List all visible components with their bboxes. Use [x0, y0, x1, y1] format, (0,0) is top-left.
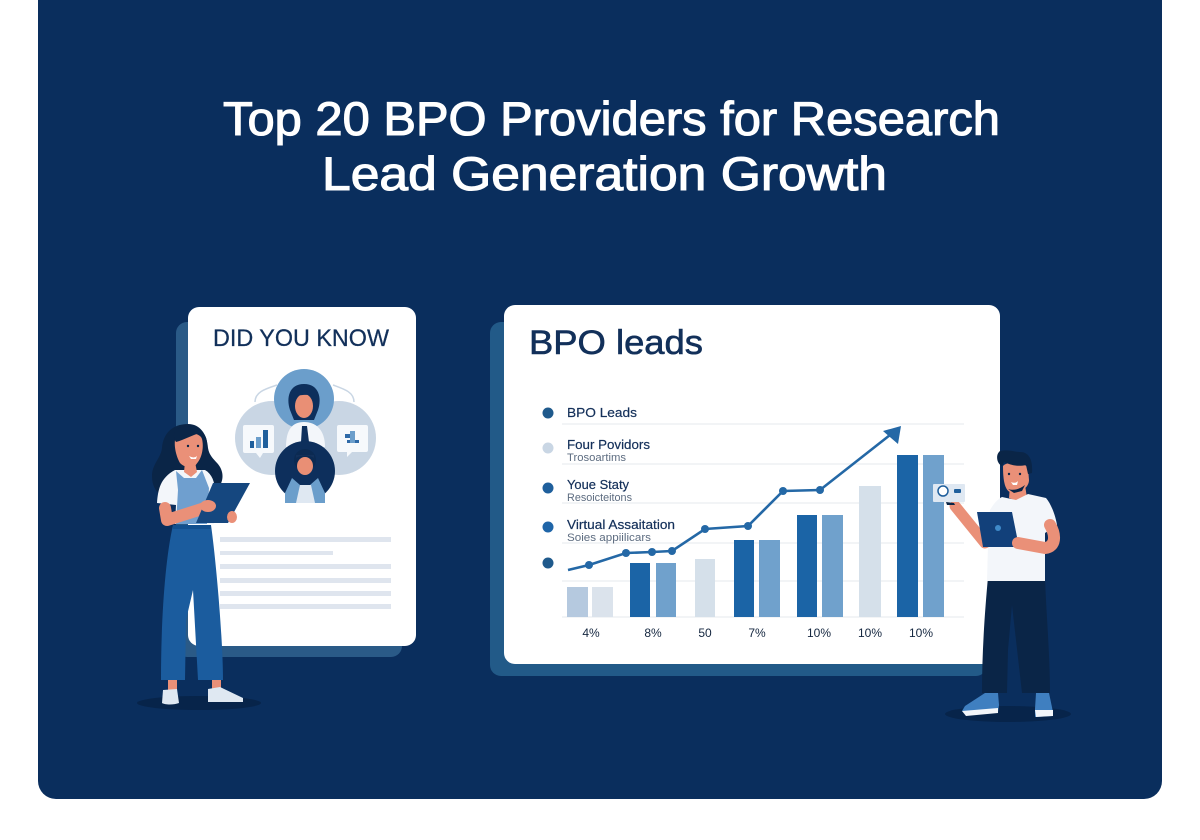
hair	[997, 450, 1032, 474]
arm	[165, 508, 205, 520]
text lines	[220, 537, 391, 609]
icon: message bubble	[337, 425, 368, 457]
clipboard	[196, 483, 250, 523]
legend: Soies appiilicars	[567, 532, 652, 544]
title: Lead Generation Growth	[322, 147, 887, 200]
tablet	[977, 512, 1019, 547]
axis labels: 10%	[909, 626, 933, 640]
axis labels: 8%	[644, 626, 662, 640]
far arm	[1018, 525, 1054, 548]
title	[223, 92, 1000, 200]
overalls bib	[176, 470, 209, 524]
trend line with arrow	[568, 426, 901, 570]
panel: BPO leads chart card	[490, 305, 1000, 676]
axis labels: 10%	[807, 626, 831, 640]
trousers	[982, 577, 1050, 693]
illustration: woman with clipboard	[137, 424, 261, 710]
hair	[152, 424, 223, 497]
heading: did you know: DID YOU KNOW	[213, 325, 389, 352]
raised arm	[955, 506, 985, 543]
axis labels: 7%	[748, 626, 766, 640]
axis labels: 10%	[858, 626, 882, 640]
neck	[184, 462, 197, 477]
icon: bar chart bubble	[243, 425, 274, 458]
legend: Resoicteitons	[567, 492, 632, 504]
axis labels: 4%	[582, 626, 600, 640]
icon: team network	[235, 369, 376, 503]
neck	[1009, 485, 1027, 502]
face	[1003, 463, 1029, 493]
shirt	[987, 494, 1057, 581]
shirt	[157, 470, 215, 524]
legs	[161, 525, 223, 680]
face	[175, 433, 203, 467]
shoes	[962, 693, 999, 715]
panel: did you know card	[176, 307, 416, 657]
small card	[933, 484, 965, 505]
grid lines	[562, 424, 964, 617]
illustration: man with tablet	[933, 450, 1071, 722]
legend: Four Povidors	[567, 437, 651, 452]
legend: BPO Leads	[567, 405, 638, 420]
shoes	[162, 689, 179, 704]
legend: Virtual Assaitation	[567, 517, 675, 532]
bar chart	[567, 455, 944, 617]
title: Top 20 BPO Providers for Research	[223, 92, 1000, 145]
heading: BPO leads: BPO leads	[529, 324, 703, 362]
legend: Trosoartims	[567, 452, 627, 464]
legend: Youe Staty	[567, 477, 629, 492]
axis labels	[582, 626, 933, 640]
legend	[542, 405, 675, 568]
axis labels: 50	[698, 626, 712, 640]
